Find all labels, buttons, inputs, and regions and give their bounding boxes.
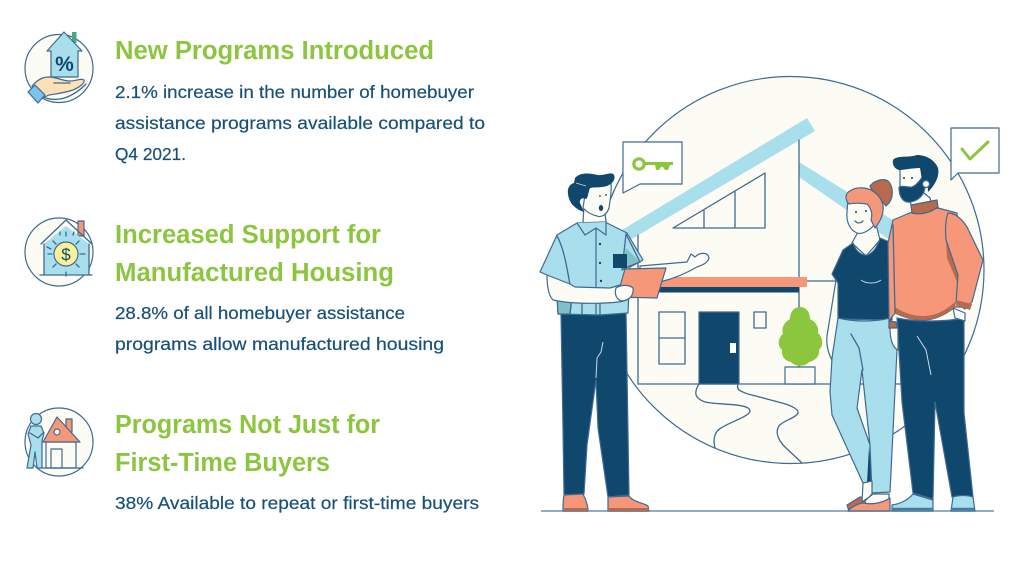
plant pot xyxy=(785,367,815,384)
agent hair xyxy=(568,173,615,212)
house window xyxy=(659,312,685,364)
speech bubble: check mark xyxy=(951,128,999,180)
heading: programs not just for first-time buyers xyxy=(115,411,380,477)
woman bun xyxy=(870,180,892,206)
woman back shoe xyxy=(847,497,870,511)
icon: check mark xyxy=(962,142,988,159)
agent shirt xyxy=(540,222,643,315)
icon: key xyxy=(634,159,673,170)
heading: new programs introduced: New Programs Introduced xyxy=(115,37,434,65)
agent face xyxy=(583,183,611,217)
person: man with beard xyxy=(888,155,983,511)
man beard xyxy=(899,176,925,202)
text: manufactured housing description xyxy=(115,303,444,354)
agent tablet xyxy=(617,268,666,298)
speech bubble: key xyxy=(623,142,682,193)
text: manufactured housing description: 28.8% of all homebuyer assistance xyxy=(115,303,405,323)
panel: programs not just for first-time buyers xyxy=(25,408,479,513)
text: new programs description: 2.1% increase in the number of homebuyer xyxy=(115,82,474,102)
man pants xyxy=(897,318,973,499)
man left shoe xyxy=(892,494,933,511)
agent gesturing arm xyxy=(640,253,709,286)
heading: increased support for manufactured housing xyxy=(115,221,394,287)
woman front shoe xyxy=(848,498,890,511)
text: new programs description: assistance programs available compared to xyxy=(115,113,485,133)
ground line xyxy=(541,510,994,512)
man hand in pocket xyxy=(953,308,965,321)
icon: house with dollar sun xyxy=(25,218,93,286)
panel: increased support for manufactured housing xyxy=(25,218,444,354)
heading: increased support for manufactured housing: Increased Support for xyxy=(115,221,381,249)
door xyxy=(699,312,739,384)
woman socks xyxy=(862,481,889,505)
man neck xyxy=(910,188,932,210)
heading: programs not just for first-time buyers: Programs Not Just for xyxy=(115,411,380,439)
agent forearm xyxy=(547,275,632,303)
person: woman xyxy=(827,180,897,511)
agent right shoe xyxy=(608,496,649,511)
background circle xyxy=(597,76,984,464)
heading: increased support for manufactured housing: Manufactured Housing xyxy=(115,259,394,287)
icon: house with percent on hand xyxy=(25,32,93,103)
agent left shoe xyxy=(563,494,588,511)
text: first-time buyers description: 38% Available to repeat or first-time buyers xyxy=(115,493,479,513)
man hair xyxy=(893,155,938,192)
icon: person beside house xyxy=(25,408,93,476)
text: new programs description: Q4 2021. xyxy=(115,144,186,164)
roof beams xyxy=(622,118,962,290)
house xyxy=(622,118,962,463)
woman top xyxy=(832,238,892,320)
agent pocket xyxy=(613,254,627,268)
small window xyxy=(754,312,766,328)
person: agent xyxy=(540,173,709,511)
woman face xyxy=(847,196,874,233)
icon: house with percent on hand: % xyxy=(55,53,74,76)
man collar xyxy=(911,200,938,214)
man hand xyxy=(890,328,898,350)
icon: house with dollar sun: $ xyxy=(61,245,71,264)
man sleeve xyxy=(946,213,983,309)
man face xyxy=(900,166,926,198)
text: new programs description xyxy=(115,82,485,164)
man sweater xyxy=(888,208,965,321)
text: manufactured housing description: programs allow manufactured housing xyxy=(115,334,444,354)
bush xyxy=(779,307,822,366)
heading: programs not just for first-time buyers: First-Time Buyers xyxy=(115,449,330,477)
walkway xyxy=(696,384,802,463)
roof band xyxy=(655,277,807,292)
man right shoe xyxy=(951,496,975,511)
woman arm xyxy=(827,280,842,362)
agent neck xyxy=(583,205,606,231)
man cuff xyxy=(889,321,897,328)
man underarm shadow xyxy=(946,240,958,282)
woman pants xyxy=(830,318,897,493)
agent hand xyxy=(615,285,633,301)
agent pants xyxy=(561,311,629,497)
woman neck xyxy=(852,224,880,256)
attic window xyxy=(673,173,765,228)
panel: new programs introduced xyxy=(25,32,485,164)
woman hair xyxy=(846,188,883,228)
illustration: agent showing house to couple xyxy=(540,76,999,511)
